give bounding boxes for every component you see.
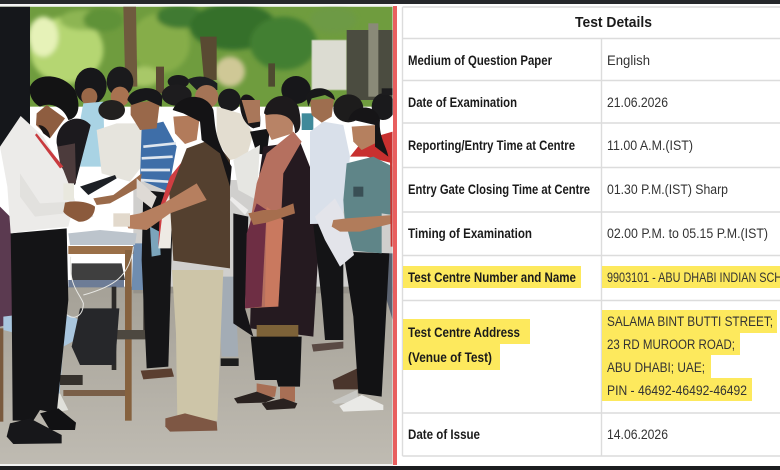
- row labels: [408, 53, 590, 442]
- girl in teal t-shirt: [315, 107, 393, 412]
- row labels: Entry Gate Closing Time at Centre: [408, 182, 590, 197]
- red divider: [393, 6, 397, 465]
- registration table: [0, 230, 157, 422]
- row labels: Test Centre Number and Name: [408, 270, 576, 285]
- back crowd: [57, 67, 395, 389]
- man in pale shirt behind: [306, 88, 350, 352]
- man in white shirt with lanyard: [0, 76, 95, 444]
- heading: Test Details: [575, 15, 652, 31]
- pavement: [0, 287, 393, 464]
- row values: [607, 53, 780, 442]
- row values: 02.00 P.M. to 05.15 P.M.(IST): [607, 226, 768, 241]
- row values: 01.30 P.M.(IST) Sharp: [607, 182, 728, 197]
- row labels: Test Centre Address: [408, 325, 520, 340]
- photo: candidates queueing at exam centre: [0, 3, 395, 464]
- bottom dark band: [0, 466, 780, 470]
- row values: PIN - 46492-46492-46492: [607, 383, 747, 398]
- panel: test details table: [402, 7, 780, 456]
- background: trees: [0, 3, 393, 107]
- row labels: Reporting/Entry Time at Centre: [408, 138, 575, 153]
- seated person: [0, 207, 83, 413]
- row values: 11.00 A.M.(IST): [607, 138, 693, 153]
- white photo edge lines: [0, 6, 393, 465]
- row values: English: [607, 53, 650, 68]
- row values: 23 RD MUROOR ROAD;: [607, 337, 735, 352]
- row labels: Date of Examination: [408, 95, 517, 110]
- man in striped shirt: [80, 88, 177, 379]
- top dark band: [0, 0, 780, 4]
- table grid: [402, 7, 780, 456]
- row labels: Date of Issue: [408, 427, 480, 442]
- row values: 21.06.2026: [607, 95, 668, 110]
- black pillar: [0, 7, 30, 147]
- yellow highlights: [403, 266, 780, 401]
- row labels: Medium of Question Paper: [408, 53, 553, 68]
- row values: 14.06.2026: [607, 427, 668, 442]
- woman in black dress with pink scarf: [230, 95, 322, 410]
- row labels: Timing of Examination: [408, 226, 532, 241]
- row labels: (Venue of Test): [408, 350, 492, 365]
- woman in brown top and khaki trousers: [113, 97, 232, 432]
- row values: ABU DHABI; UAE;: [607, 360, 705, 375]
